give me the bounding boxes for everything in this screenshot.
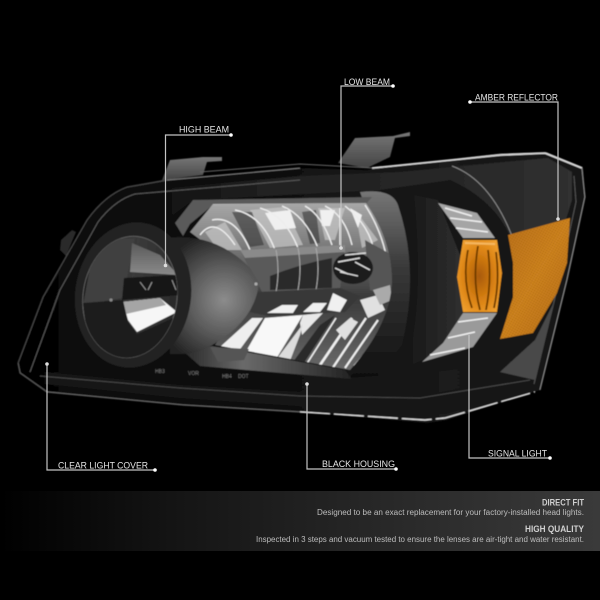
callout: black housing bbox=[305, 382, 398, 471]
low beam bezel top left bbox=[175, 197, 372, 236]
lens text bbox=[155, 369, 249, 380]
inner dark band bbox=[122, 275, 180, 300]
projector ring bbox=[65, 215, 201, 375]
heading: high quality: HIGH QUALITY bbox=[525, 524, 584, 534]
right chrome filler bbox=[364, 240, 392, 292]
upper blades bbox=[199, 204, 386, 252]
headlight illustration bbox=[18, 132, 585, 423]
housing top band bbox=[125, 158, 572, 238]
lens text: HB4 bbox=[222, 374, 232, 380]
callout: clear light cover: CLEAR LIGHT COVER bbox=[58, 460, 148, 470]
mounting tab left bbox=[162, 157, 222, 180]
lens edge highlights bbox=[18, 153, 585, 420]
mounting tab right bbox=[338, 132, 410, 168]
text: direct fit description: Designed to be an exact replacement for your factory-installed head lights. bbox=[317, 508, 584, 517]
heading: direct fit: DIRECT FIT bbox=[542, 498, 584, 508]
lens text: HB3 bbox=[155, 369, 165, 375]
bulb bbox=[333, 252, 373, 284]
lower slabs bbox=[267, 293, 347, 313]
amber side reflector bbox=[500, 218, 570, 339]
panel: features bbox=[0, 491, 600, 551]
grey strip right of low beam bbox=[350, 191, 410, 378]
housing lower grey wedge bbox=[500, 300, 555, 380]
callout: black housing: BLACK HOUSING bbox=[322, 459, 395, 469]
lens outer shell bbox=[18, 152, 585, 423]
callout: high beam: HIGH BEAM bbox=[179, 124, 229, 134]
central barrel bbox=[240, 245, 345, 292]
infographic canvas bbox=[17, 78, 600, 551]
lens text: VOR bbox=[188, 371, 199, 377]
lower lip band bbox=[45, 372, 536, 414]
projector screws bbox=[109, 298, 113, 302]
signal chrome upper bbox=[438, 203, 495, 238]
text: high quality description: Inspected in 3 steps and vacuum tested to ensure the lenses are air-tight and water resistant. bbox=[256, 535, 584, 544]
signal chrome lower bbox=[422, 313, 497, 362]
lens text: DOT bbox=[238, 374, 249, 380]
small vent bbox=[210, 347, 249, 362]
signal amber lens bbox=[457, 240, 502, 312]
callout: clear light cover bbox=[45, 362, 157, 472]
thin arc line on housing bbox=[452, 166, 512, 236]
side clips bbox=[44, 230, 76, 300]
hood bbox=[83, 238, 135, 305]
callout: high beam bbox=[164, 124, 233, 267]
callout: low beam bbox=[339, 77, 395, 250]
lower shade bbox=[83, 300, 174, 358]
signal arc bezel bbox=[395, 180, 514, 375]
upper blade fills bbox=[205, 207, 378, 250]
projector opening bbox=[75, 230, 185, 364]
low beam chrome reflector bbox=[189, 202, 392, 370]
bezel inner panel bbox=[405, 195, 470, 368]
callout: amber reflector bbox=[468, 92, 560, 221]
callout: signal light: SIGNAL LIGHT bbox=[488, 448, 547, 458]
bright patch bbox=[123, 298, 177, 332]
projector dome bbox=[165, 237, 259, 354]
upper trim line bbox=[213, 203, 278, 205]
callout: amber reflector: AMBER REFLECTOR bbox=[475, 92, 558, 102]
low beam lower ledge bbox=[185, 346, 352, 379]
mid gloss band bbox=[250, 288, 348, 316]
callout: low beam: LOW BEAM bbox=[344, 77, 390, 87]
callout: signal light bbox=[469, 335, 552, 460]
